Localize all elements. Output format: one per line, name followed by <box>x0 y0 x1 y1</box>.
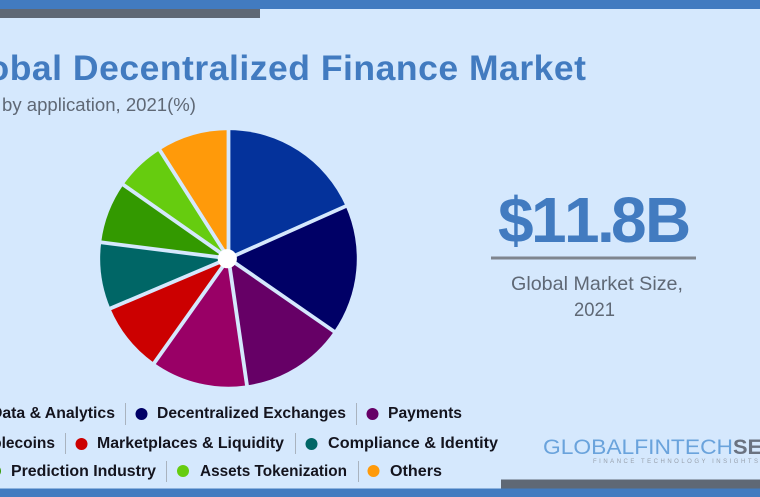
legend <box>0 403 498 482</box>
legend item: Assets Tokenization: Assets Tokenization <box>200 463 347 480</box>
slice: Data & Analytics <box>228 130 346 258</box>
slice: Stablecoins <box>154 258 247 387</box>
slice: Prediction Industry <box>101 185 228 258</box>
slice: Assets Tokenization <box>123 150 228 258</box>
top bar <box>0 0 760 18</box>
bottom bar <box>0 480 760 497</box>
slice: Decentralized Exchanges <box>228 206 357 331</box>
logo wordmark: GLOBALFINTECH <box>543 436 733 459</box>
legend item: Others: Others <box>390 463 442 480</box>
slice: Marketplaces & Liquidity <box>110 258 228 363</box>
logo <box>543 436 760 465</box>
legend item: Compliance & Identity: Compliance & Identity <box>328 435 498 452</box>
market size callout <box>491 184 696 321</box>
slice: Compliance & Identity <box>100 242 228 308</box>
pie chart <box>98 126 357 389</box>
legend item: Payments: Payments <box>388 405 462 422</box>
legend item: Others <box>368 463 442 480</box>
market size value: $11.8B <box>498 184 691 256</box>
slice: Others <box>160 130 228 258</box>
market size year: 2021 <box>574 299 615 321</box>
pie centre hole <box>218 249 237 268</box>
logo tagline: FINANCE TECHNOLOGY INSIGHTS <box>593 459 758 465</box>
legend item: Marketplaces & Liquidity: Marketplaces & Liquidity <box>97 435 284 452</box>
subtitle: by application, 2021(%) <box>2 94 196 115</box>
legend item: Prediction Industry: Prediction Industry <box>11 463 156 480</box>
market size caption: Global Market Size, <box>511 273 683 295</box>
slice: Payments <box>228 258 334 385</box>
legend item: Decentralized Exchanges: Decentralized Exchanges <box>157 405 346 422</box>
